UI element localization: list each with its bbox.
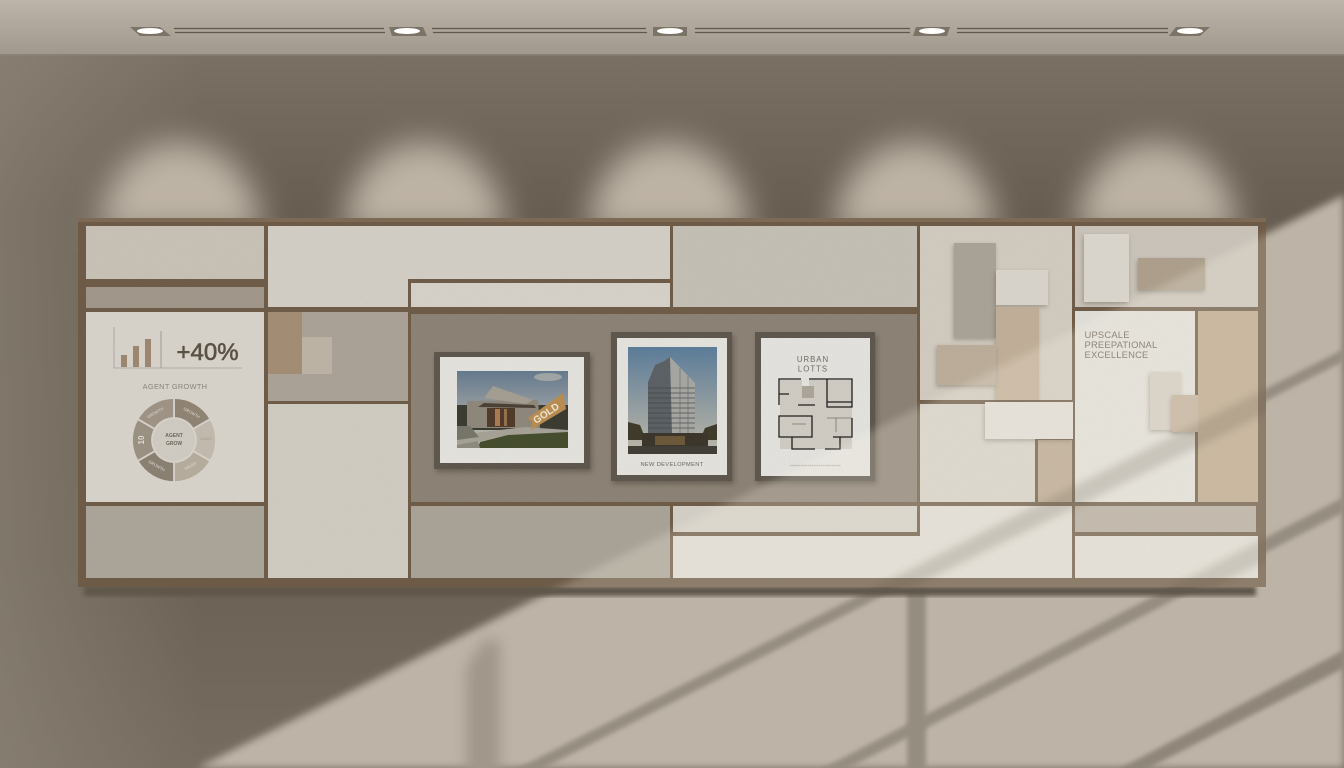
panel: top long L-shaped xyxy=(268,226,670,307)
internal frame lines xyxy=(86,279,670,283)
donut labels: SALES xyxy=(200,437,212,441)
donut labels: AGENT xyxy=(165,433,183,439)
panel: beige column xyxy=(1198,311,1258,502)
panel: tall fabric xyxy=(268,404,408,578)
small caption line xyxy=(790,464,841,466)
panel: lower center fabric xyxy=(411,506,670,578)
panel: lower long L-shaped xyxy=(673,506,1072,578)
heading: urban lofts: LOTTS xyxy=(798,364,828,374)
donut labels: GROW xyxy=(166,441,182,447)
floor plan drawing xyxy=(779,379,852,449)
stat: plus forty percent: +40% xyxy=(176,339,239,366)
panel: lower right strip xyxy=(1075,506,1256,532)
chart title: AGENT GROWTH xyxy=(143,382,207,391)
bar chart xyxy=(113,327,242,368)
sunlight and shadow across the panels xyxy=(554,231,1266,587)
photo: residential tower xyxy=(628,347,717,454)
sunlight cast on the wall xyxy=(197,195,1344,768)
donut labels: GROWTH xyxy=(148,459,166,472)
shadow beneath frame xyxy=(84,586,1256,596)
fabric grain xyxy=(86,226,1258,578)
panel: right composition two xyxy=(920,402,1073,502)
heading: upscale text: UPSCALE xyxy=(1084,329,1130,340)
panel: left column taupe composite xyxy=(268,312,408,401)
heading: urban lofts: URBAN xyxy=(797,355,829,364)
donut labels: SALES xyxy=(183,460,197,471)
framed photo: house xyxy=(434,352,590,469)
photo: house with sold ribbon: GOLD xyxy=(532,401,562,427)
heading: upscale text: EXCELLENCE xyxy=(1084,349,1149,360)
donut chart xyxy=(132,398,216,482)
panel: infographic card xyxy=(86,312,264,502)
panel: upper-left taupe strip xyxy=(86,287,264,308)
photo: house with sold ribbon xyxy=(457,371,568,448)
panel: top right swatches xyxy=(1075,226,1258,307)
downlight fixtures xyxy=(130,27,1210,36)
donut labels: GROWTH xyxy=(183,406,201,419)
ceiling with recessed lights xyxy=(0,0,1344,56)
panel: upper-left fabric xyxy=(86,226,264,279)
panel: upscale text card xyxy=(1075,311,1198,502)
panel: center dark backing xyxy=(411,314,917,502)
panel: right composition one xyxy=(920,226,1072,400)
framed floor plan: urban lofts xyxy=(755,332,875,481)
panel: lower strip xyxy=(673,506,917,532)
panel: top center fabric xyxy=(673,226,917,307)
wash lights on the wall xyxy=(100,142,1238,232)
caption: new development: NEW DEVELOPMENT xyxy=(640,462,704,468)
modular wall panel frame xyxy=(78,218,1266,587)
panel: lower-left fabric xyxy=(86,506,264,578)
donut labels: 10 xyxy=(137,435,146,444)
panel: lower right light xyxy=(1075,536,1258,578)
linear ceiling slots xyxy=(174,28,1168,32)
framed photo: new development tower xyxy=(611,332,732,481)
panel: top inset strip xyxy=(411,283,670,307)
donut labels: GROWTH xyxy=(146,406,164,419)
heading: upscale text: PREEPATIONAL xyxy=(1084,339,1157,350)
donut labels xyxy=(137,406,212,472)
